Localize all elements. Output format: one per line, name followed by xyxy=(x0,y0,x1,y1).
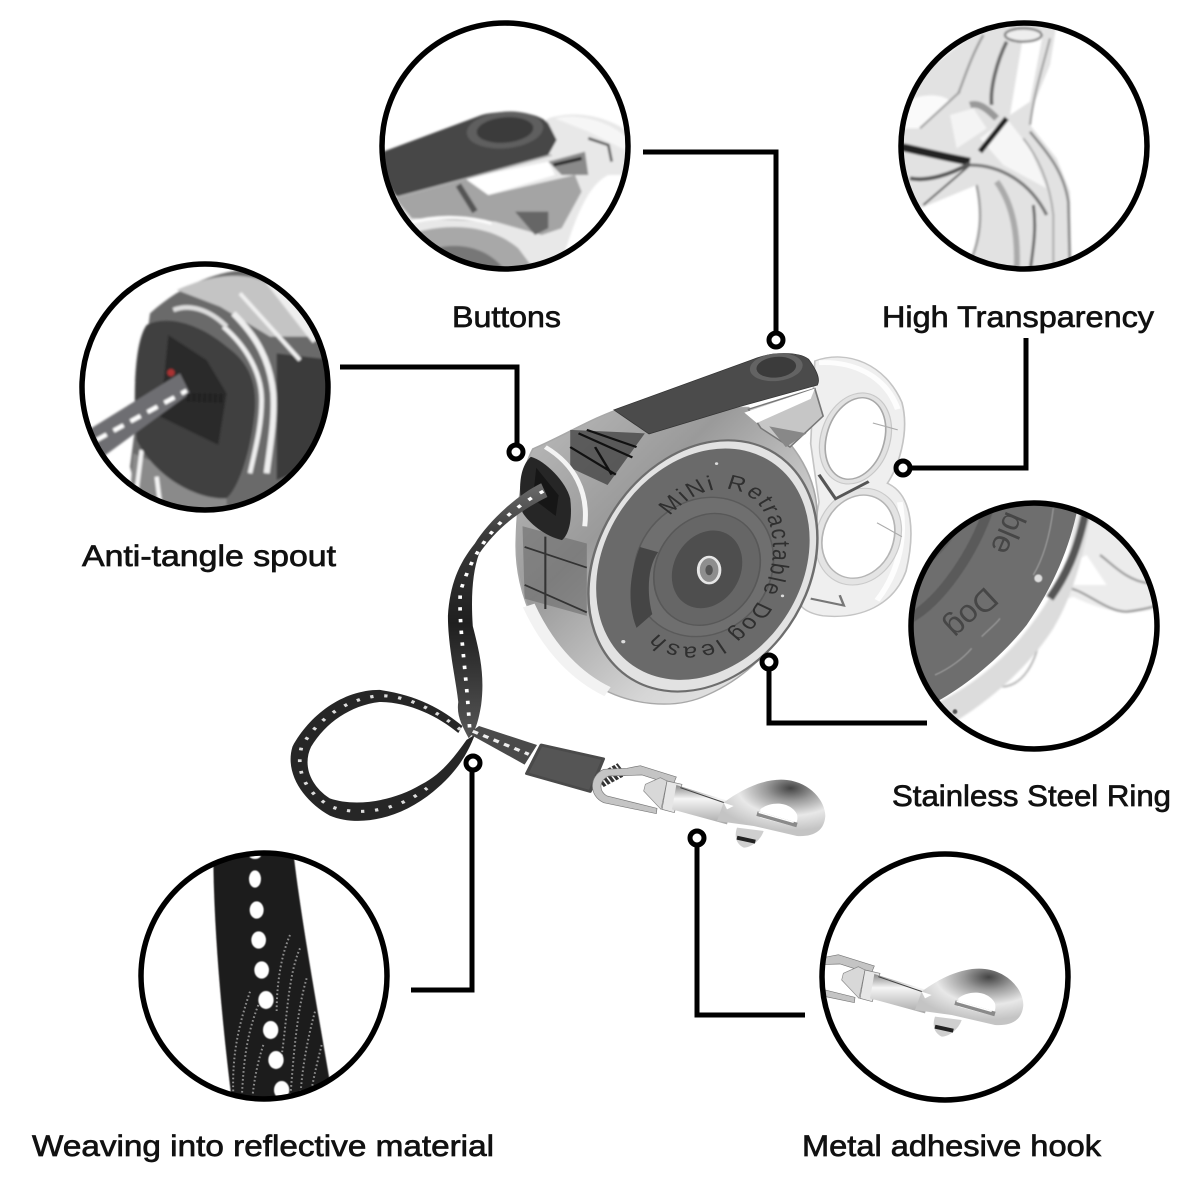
snap hook xyxy=(592,766,825,848)
connector xyxy=(527,745,603,791)
reel face xyxy=(587,439,819,693)
push button xyxy=(614,350,818,434)
lens: high transparency xyxy=(897,22,1147,278)
lens: buttons xyxy=(382,23,635,275)
braided cord xyxy=(599,769,622,781)
handle rings xyxy=(799,357,912,616)
callout: stainless steel ring xyxy=(762,655,927,723)
lens: snap hook xyxy=(790,854,1068,1100)
label: Buttons: Buttons xyxy=(452,301,561,334)
callout: metal hook xyxy=(690,831,805,1015)
leash strap xyxy=(291,483,547,821)
face lettering close-up: Dog xyxy=(938,581,1005,646)
label: Metal adhesive hook: Metal adhesive hook xyxy=(802,1130,1102,1163)
lens: stainless steel ring xyxy=(900,495,1163,749)
label: Anti-tangle spout: Anti-tangle spout xyxy=(82,540,337,573)
face lettering: MiNi Retractable Dog leash xyxy=(651,474,790,658)
face lettering close-up xyxy=(938,507,1033,646)
callout: weaving xyxy=(411,756,480,990)
callout: anti-tangle spout xyxy=(340,367,523,459)
product: retractable leash xyxy=(290,353,912,821)
callout: buttons xyxy=(643,152,783,347)
label: High Transparency: High Transparency xyxy=(882,301,1154,334)
spout xyxy=(520,457,571,540)
label: Stainless Steel Ring: Stainless Steel Ring xyxy=(892,780,1171,813)
lens: anti-tangle spout xyxy=(82,264,333,517)
case body xyxy=(516,389,823,704)
face lettering close-up: ble xyxy=(984,507,1033,560)
label: Weaving into reflective material: Weaving into reflective material xyxy=(32,1130,494,1163)
callout: high transparency xyxy=(896,338,1026,475)
lens: reflective weave xyxy=(141,851,387,1112)
